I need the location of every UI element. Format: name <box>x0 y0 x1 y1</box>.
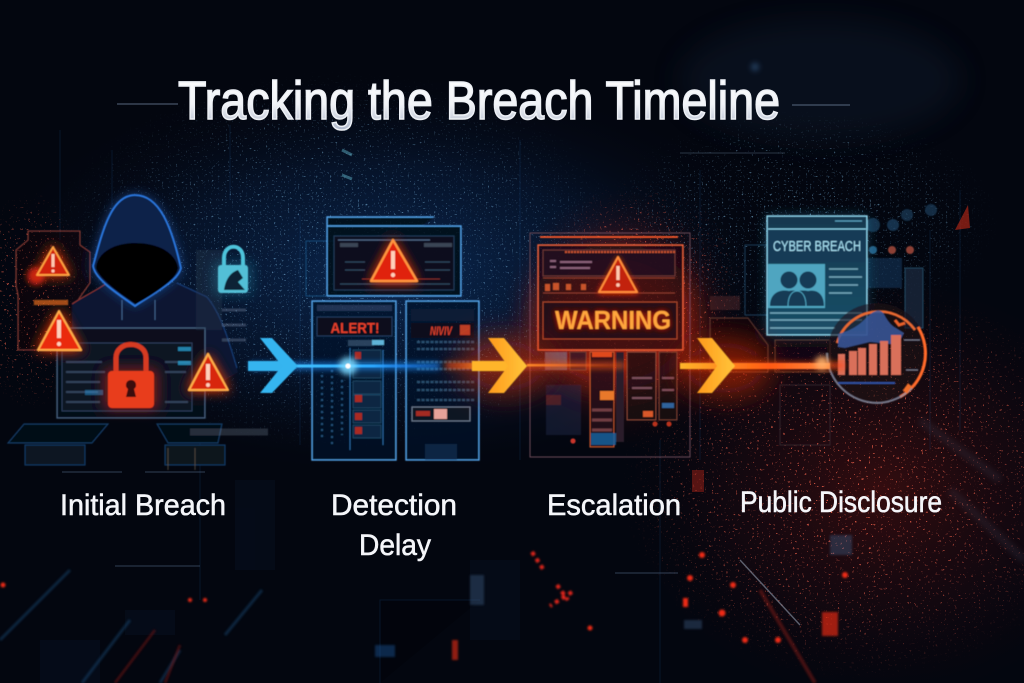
left alert panel <box>312 301 396 460</box>
alert label: ALERT! <box>330 320 380 337</box>
label: detection delay: Detection <box>331 489 457 522</box>
right alert panel <box>406 301 479 460</box>
outer frame <box>530 233 690 457</box>
label: initial breach: Initial Breach <box>60 489 226 522</box>
red HUD frame behind warning <box>16 231 90 350</box>
step labels <box>60 486 942 562</box>
analytics ring <box>827 303 927 403</box>
icon: warning triangle <box>597 256 639 294</box>
side panels <box>710 204 937 445</box>
right alert panel: NIVIV <box>430 324 453 338</box>
bars <box>838 335 901 375</box>
photo with two people <box>768 264 825 308</box>
stage 3: escalation <box>530 233 697 457</box>
lower console <box>545 352 677 447</box>
warning label: WARNING <box>555 305 671 335</box>
news document <box>767 216 867 335</box>
label: public disclosure: Public Disclosure <box>740 486 942 519</box>
icon: warning triangle 3 <box>187 353 230 391</box>
top alert panel <box>306 217 461 296</box>
hooded figure <box>72 195 238 400</box>
arrow: orange 2 <box>677 338 845 398</box>
icon: warning triangle 1 <box>27 245 71 285</box>
status bar in HUD frame <box>34 300 68 305</box>
warning console <box>538 237 683 350</box>
stage 2: detection delay <box>306 217 479 460</box>
stage 4: public disclosure <box>710 204 937 445</box>
icon: red padlock <box>104 344 158 410</box>
label: escalation: Escalation <box>547 489 681 522</box>
label: detection delay: Delay <box>359 529 431 562</box>
label: detection delay <box>331 489 457 562</box>
title: Tracking the Breach Timeline <box>178 71 780 131</box>
arrow: orange 1 <box>445 336 625 396</box>
headline: CYBER BREACH <box>773 238 861 255</box>
icon: blue padlock <box>196 247 252 340</box>
keyboard panels <box>8 424 268 470</box>
icon: warning triangle <box>369 238 419 283</box>
laptop panel <box>57 328 205 418</box>
warning label: WARNING <box>555 305 671 335</box>
stage 1: initial breach <box>8 195 268 470</box>
icon: warning triangle 2 <box>36 309 83 351</box>
arrow: blue <box>248 338 440 393</box>
